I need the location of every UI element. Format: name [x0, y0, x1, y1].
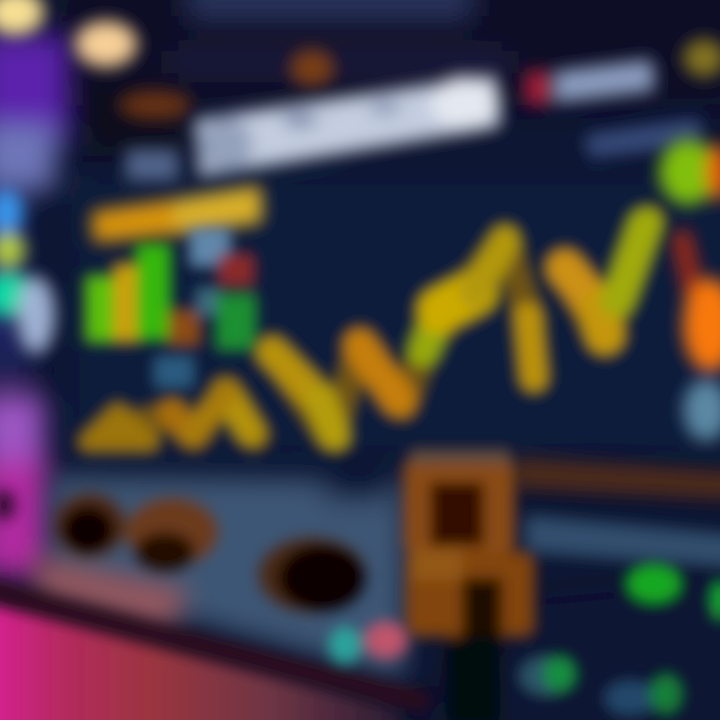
- dark edge above floor: [0, 576, 430, 714]
- salmon reflection on desk: [35, 555, 190, 630]
- zigzag segment: drop: [528, 318, 534, 378]
- top dark band: [60, 0, 720, 155]
- lower desk surface: [50, 475, 405, 680]
- brown horizontal ledge: [515, 458, 720, 500]
- mini bar chart: [86, 228, 256, 388]
- small coins: [0, 489, 366, 613]
- chart end markers: [660, 140, 720, 440]
- blue panels at right: [525, 515, 720, 568]
- top orange glows: [119, 40, 720, 119]
- zigzag segment: right peak: [565, 225, 645, 335]
- pink floor: [0, 600, 400, 720]
- zigzag segment: centre: [272, 345, 398, 436]
- small glowing keys: [329, 564, 720, 716]
- coin stack: [404, 450, 534, 720]
- heading blur: large white title: [195, 76, 500, 176]
- zigzag segment: rising: [424, 240, 505, 350]
- chart panel: [70, 175, 720, 455]
- dark lower right: [420, 600, 720, 720]
- zigzag segment: left mountains: [88, 392, 250, 442]
- left purple strip: [0, 35, 68, 575]
- left colored lights: [0, 0, 136, 353]
- top right label blur: [126, 60, 702, 180]
- yellow legend bar: [92, 186, 262, 242]
- zigzag underlay: [118, 220, 650, 435]
- line chart: yellow zigzag: [88, 220, 650, 442]
